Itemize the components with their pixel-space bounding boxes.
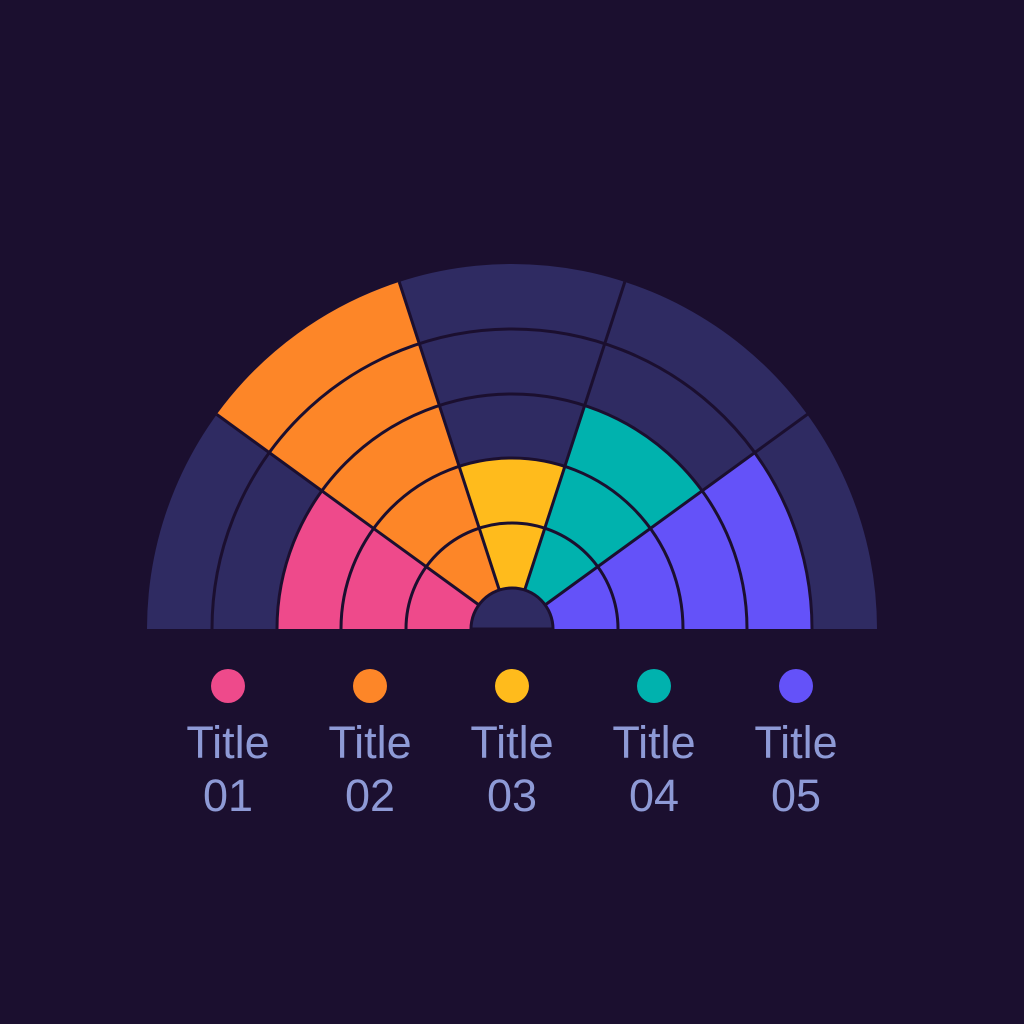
legend item 03: 03	[487, 770, 537, 821]
segment: teal Title 04	[512, 406, 702, 629]
legend item 03	[470, 669, 554, 821]
legend	[186, 669, 838, 821]
legend item 05: 05	[771, 770, 821, 821]
semicircle radial chart	[147, 264, 877, 629]
legend item 01: Title	[186, 717, 270, 768]
legend item 04: 04	[629, 770, 679, 821]
legend item 04	[612, 669, 696, 821]
legend item 03: Title	[470, 717, 554, 768]
segment: yellow Title 03	[459, 458, 565, 629]
legend item 05: Title	[754, 717, 838, 768]
segment: purple Title 05	[512, 453, 812, 629]
center hub	[471, 588, 553, 629]
legend item 05	[754, 669, 838, 821]
legend item 02: Title	[328, 717, 412, 768]
chart background semicircle	[147, 264, 877, 629]
legend item 04: Title	[612, 717, 696, 768]
legend item 01	[186, 669, 270, 821]
segment: pink Title 01	[277, 491, 512, 629]
legend item 01: 01	[203, 770, 253, 821]
segment: orange Title 02	[217, 282, 512, 629]
legend item 02	[328, 669, 412, 821]
legend item 02: 02	[345, 770, 395, 821]
